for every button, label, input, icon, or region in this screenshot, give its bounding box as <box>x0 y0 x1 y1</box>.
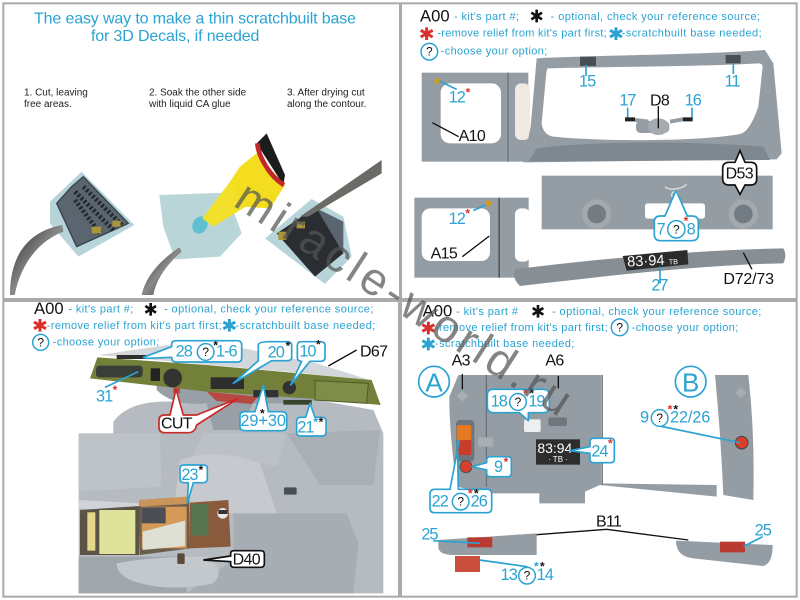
callout: 23 <box>180 463 207 503</box>
callout: 28 ? 1-6: ? <box>202 345 209 359</box>
legend: A00 <box>420 7 450 26</box>
callout: 10: * <box>316 338 321 352</box>
step 3 text: along the contour. <box>287 99 366 110</box>
callout: D53: D53 <box>726 166 754 183</box>
callout: 7 ? 8: * <box>684 214 689 228</box>
callout: 21 <box>297 403 326 437</box>
legend: ? <box>37 335 44 349</box>
part A15: A15 <box>431 245 458 262</box>
part D53 windscreen frame: 15 <box>579 73 596 91</box>
legend: - kit's part #; <box>454 11 519 23</box>
callout: 23: * <box>199 463 204 477</box>
callout: 21: * <box>313 415 318 429</box>
legend: - kit's part #; <box>68 303 133 315</box>
legend: ? <box>426 45 433 59</box>
callout: 7 ? 8: 7 <box>657 220 666 238</box>
title: The easy way to make a thin scratchbuilt base <box>34 10 356 27</box>
step 2 image: decal and glue bottle <box>142 133 285 295</box>
dashboard D67: D67 <box>360 344 388 361</box>
callout: 21: * <box>319 415 324 429</box>
callout: 20: 20 <box>268 343 285 361</box>
callout: 28 ? 1-6: 1-6 <box>216 343 238 361</box>
callout: 28 ? 1-6: * <box>213 338 218 352</box>
callout: 28 ? 1-6: 28 <box>176 343 193 361</box>
callout: 22 ? 26: 26 <box>471 493 488 511</box>
part B11: * <box>534 560 539 574</box>
legend: -scratchbuilt base needed; <box>235 320 375 332</box>
part A10: 12 <box>449 88 466 106</box>
part B11: 14 <box>537 566 554 584</box>
callout: 18 ? 19 <box>487 386 549 421</box>
callout: 18 ? 19: 19 <box>528 393 545 411</box>
callout: 7 ? 8: ? <box>673 222 680 236</box>
legend <box>33 299 375 350</box>
door A with parts A3 and A6: A6 <box>545 353 564 370</box>
part A10 <box>422 73 530 162</box>
legend: -scratchbuilt base needed; <box>435 338 574 350</box>
part D53 windscreen frame: D8 <box>650 92 670 109</box>
callout: 22 ? 26 <box>430 440 492 513</box>
panel: windscreen parts <box>401 3 797 299</box>
part B11: * <box>540 560 545 574</box>
legend: - optional, check your reference source; <box>164 303 373 315</box>
part B11: ? <box>524 569 531 583</box>
legend: ? <box>616 320 623 334</box>
callout: 21: 21 <box>297 419 314 437</box>
legend: -choose your option; <box>632 322 738 334</box>
panel: dashboard and map <box>3 299 399 597</box>
door part option B: ? <box>656 411 663 425</box>
option B marker: B <box>682 367 699 397</box>
door part option B: 22/26 <box>670 409 710 427</box>
part D53 windscreen frame: 17 <box>619 91 636 109</box>
door A with parts A3 and A6: A3 <box>452 353 471 370</box>
door part option B: 9 <box>640 409 649 427</box>
part A15: * <box>465 207 470 221</box>
legend: - optional, check your reference source; <box>552 306 761 318</box>
step 1 text: 1. Cut, leaving <box>24 87 88 98</box>
door part option B <box>640 375 754 500</box>
callout: 9: 9 <box>494 458 503 476</box>
part D72/73 visor and plate <box>514 248 785 295</box>
callout: 9: * <box>504 455 509 469</box>
part A10: * <box>466 86 471 100</box>
panel: scratchbuilt base instructions <box>3 3 400 299</box>
legend <box>422 302 761 350</box>
callout: 29+30: 29+30 <box>240 412 286 430</box>
license plate: · TB · <box>548 455 568 464</box>
callout: 24 <box>570 436 614 463</box>
callout: 20 <box>233 339 292 383</box>
title <box>34 10 356 45</box>
callout: D40 <box>177 551 264 568</box>
step 2 text: with liquid CA glue <box>148 99 231 110</box>
legend: -scratchbuilt base needed; <box>622 28 762 40</box>
callout: CUT <box>159 389 238 433</box>
license plate <box>536 439 580 465</box>
watermark: miracle-world.ru <box>227 170 582 426</box>
step 3 text: 3. After drying cut <box>287 87 365 98</box>
legend: -remove relief from kit's part first; <box>47 320 222 332</box>
legend: -choose your option; <box>441 45 547 57</box>
part 7/8 dash panel <box>542 176 773 229</box>
part B11 <box>421 514 773 584</box>
callout: 10: 10 <box>299 343 316 361</box>
callout: 18 ? 19: * <box>529 386 534 400</box>
callout: 29+30 <box>240 385 287 431</box>
option A marker: A <box>425 367 443 397</box>
callout: 10 <box>291 338 325 385</box>
callout: 7 ? 8 <box>654 192 698 241</box>
legend: A00 <box>34 299 64 318</box>
door part option B: * <box>668 402 673 416</box>
callout: 22 ? 26: 22 <box>432 493 449 511</box>
part B11: 25 <box>755 521 772 539</box>
callout: 22 ? 26: * <box>468 486 473 500</box>
part A15: 12 <box>449 210 466 228</box>
callout: 28 ? 1-6 <box>143 338 242 362</box>
part A10: A10 <box>459 128 486 145</box>
legend: -remove relief from kit's part first; <box>437 28 607 40</box>
part B11: B11 <box>596 514 622 531</box>
step 3 image: decal cut out <box>265 160 382 284</box>
callout: 9 <box>472 455 511 477</box>
floor and seats 3D view <box>79 383 383 593</box>
callout: 18 ? 19: * <box>523 386 528 400</box>
callout: 23: 23 <box>181 466 198 484</box>
part A15 <box>414 198 530 278</box>
legend <box>420 7 762 60</box>
callout: 24: 24 <box>591 443 608 461</box>
door part option B: * <box>673 402 678 416</box>
legend: A00 <box>423 302 452 321</box>
part D72/73 visor and plate: 83·94 TB <box>627 252 679 271</box>
part B11: 25 <box>421 525 438 543</box>
callout: 18 ? 19: ? <box>515 395 522 409</box>
part D72/73 visor and plate: D72/73 <box>723 271 774 288</box>
callout: 22 ? 26: * <box>474 486 479 500</box>
callout: 24: * <box>608 436 613 450</box>
legend: -remove relief from kit's part first; <box>435 322 608 334</box>
panel: side doors and parts <box>401 301 797 597</box>
license plate: 83:94 <box>537 440 573 456</box>
callout: 22 ? 26: ? <box>457 495 464 509</box>
dashboard D67 <box>90 340 388 405</box>
legend: -choose your option; <box>53 337 159 349</box>
step 1 text: free areas. <box>24 99 72 110</box>
step 2 text: 2. Soak the other side <box>149 87 247 98</box>
option A marker <box>419 366 449 397</box>
label: 31: 31 <box>96 388 113 406</box>
legend: - optional, check your reference source; <box>551 11 760 23</box>
label: 31: * <box>113 383 118 397</box>
step 1 image: decal in tweezers <box>10 172 134 295</box>
option B marker <box>675 366 706 397</box>
legend: - kit's part # <box>456 306 519 318</box>
map and documents <box>80 497 231 555</box>
callout: D53 <box>723 151 757 194</box>
door A with parts A3 and A6 <box>449 353 717 503</box>
label: 31 <box>96 372 138 406</box>
part D72/73 visor and plate: 27 <box>651 277 668 295</box>
callout: 20: * <box>286 339 291 353</box>
title: for 3D Decals, if needed <box>91 28 259 45</box>
callout: 18 ? 19: 18 <box>491 393 508 411</box>
callout: CUT: CUT <box>161 415 193 432</box>
callout: 7 ? 8: 8 <box>687 220 696 238</box>
part D53 windscreen frame: 16 <box>685 91 702 109</box>
part D53 windscreen frame: 11 <box>725 73 741 91</box>
part D53 windscreen frame <box>523 50 782 162</box>
callout: D40: D40 <box>233 551 261 568</box>
part B11: 13 <box>501 566 518 584</box>
callout: 29+30: * <box>260 406 265 420</box>
